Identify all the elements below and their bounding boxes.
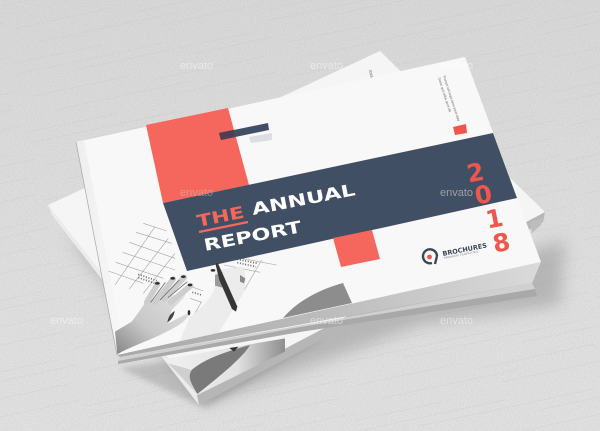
nail shape — [229, 347, 238, 352]
finger gaps — [151, 280, 187, 302]
fingers shadow — [215, 272, 223, 288]
pen — [215, 263, 237, 312]
lower book right page corner — [530, 218, 543, 233]
logo tagline: PREMIUM TEMPLATES — [443, 249, 479, 260]
small vertical text: Praesent sed neque lorem ipsum dolor — [442, 75, 461, 123]
word: ANNUAL: ANNUAL — [250, 180, 357, 219]
title text — [195, 180, 357, 255]
left hand photo — [115, 275, 192, 354]
spine shading — [76, 140, 125, 355]
navy title band — [163, 133, 517, 271]
lower book — [48, 51, 545, 405]
light side of hand — [168, 363, 197, 394]
grey bar accent — [249, 133, 272, 143]
drop shadow beneath books — [70, 240, 565, 408]
page bottom edge — [118, 289, 537, 364]
envato watermarks: envato — [440, 315, 473, 327]
red panel — [146, 108, 249, 203]
fingers — [147, 277, 191, 302]
underline of THE — [199, 222, 248, 232]
envato watermarks: envato — [440, 187, 473, 199]
spine edge line — [76, 142, 117, 355]
pages block — [118, 283, 535, 361]
envato watermarks: envato — [440, 60, 473, 72]
dotted marks on cover — [138, 259, 257, 295]
nails — [155, 275, 192, 315]
word: THE: THE — [195, 203, 246, 231]
cover sheet — [76, 57, 541, 355]
year digits: 2 — [464, 157, 487, 189]
dark forearm wedge — [190, 345, 250, 394]
year digits: 0 — [472, 179, 495, 211]
top book cover — [76, 57, 541, 355]
logo wordmark: BROCHURES — [442, 241, 488, 258]
year digits: 1 — [483, 203, 506, 235]
grid pattern on cover — [108, 223, 277, 313]
envato watermarks: envato — [310, 60, 343, 72]
year digits: 8 — [490, 227, 513, 259]
palm and wrist — [115, 293, 188, 354]
top book pages under cover — [117, 262, 541, 364]
envato watermarks — [50, 60, 473, 327]
photo background — [165, 338, 285, 395]
year digits — [464, 157, 513, 259]
lower red square — [333, 230, 380, 267]
word: REPORT: REPORT — [202, 217, 304, 255]
lower book right-hand thickness — [197, 212, 545, 405]
lower book hand photo — [165, 338, 285, 395]
lower book text marks: 2018 — [368, 69, 374, 78]
envato watermarks: envato — [180, 60, 213, 72]
shadowed gap under cover — [117, 262, 541, 357]
lower book cover — [48, 51, 545, 395]
navy bar accent — [219, 123, 269, 140]
lower book left thickness — [48, 205, 199, 405]
right hand with pen — [180, 262, 246, 341]
Brochures logo — [423, 241, 488, 264]
envato watermarks: envato — [50, 315, 83, 327]
logo dot — [427, 255, 432, 259]
small vertical text — [437, 75, 461, 123]
hand and arm — [180, 267, 246, 341]
nail — [211, 269, 215, 272]
envato watermarks: envato — [180, 187, 213, 199]
small vertical text: Donec quis tellus amet elit — [437, 77, 452, 113]
envato watermarks: envato — [310, 315, 343, 327]
small red square top right — [453, 124, 467, 135]
dark shadow by thumb — [167, 311, 175, 322]
grey knitted hump photo — [283, 283, 352, 318]
logo ring — [423, 249, 437, 263]
